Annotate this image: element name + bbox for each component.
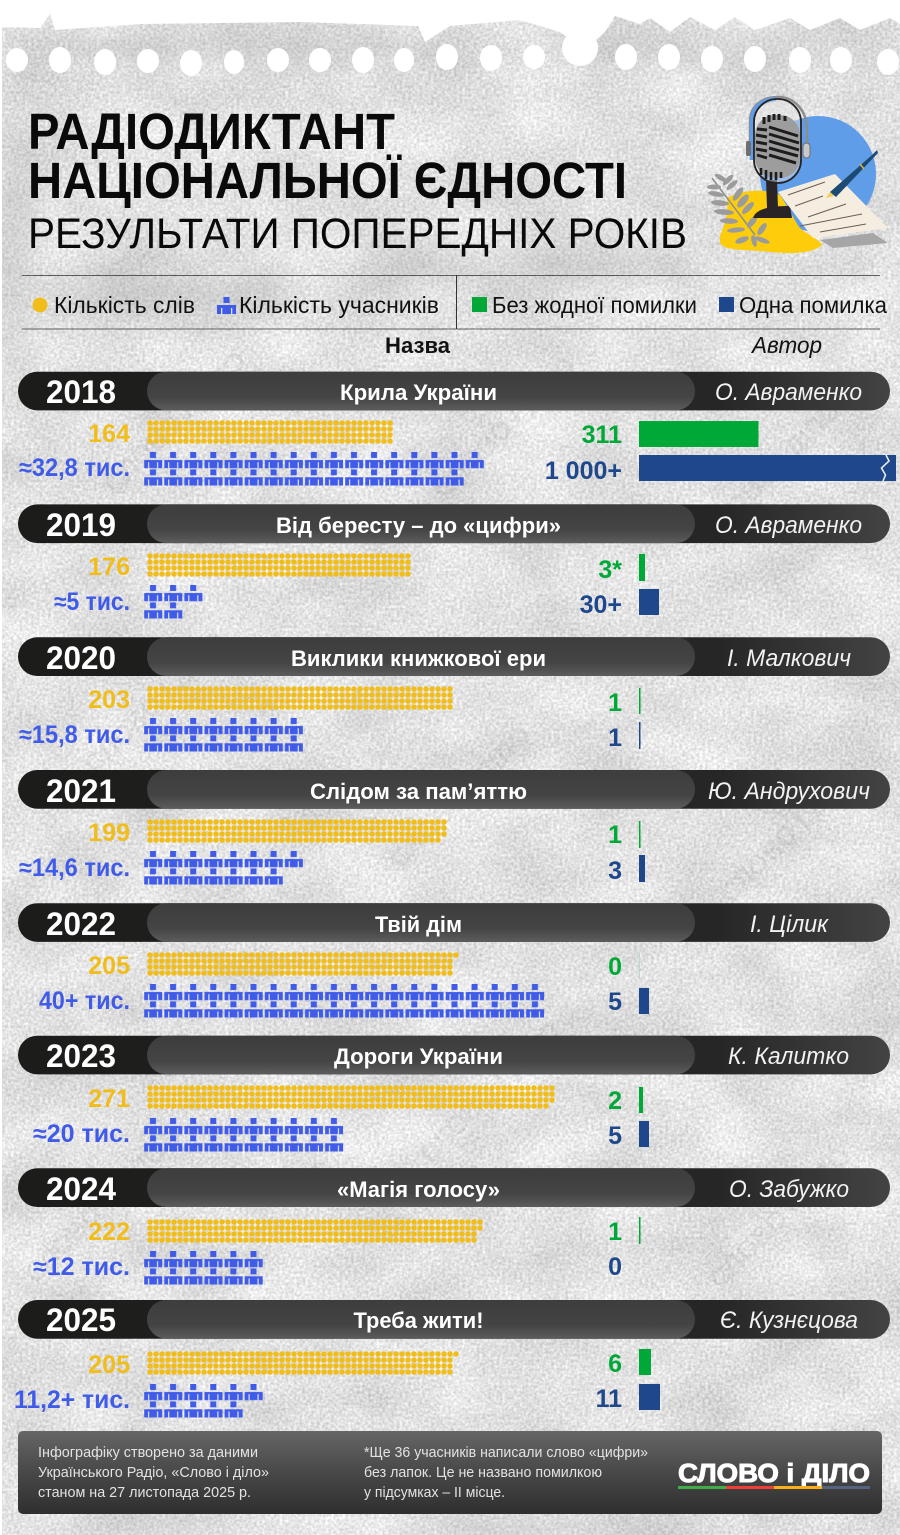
watermarks: О — [481, 103, 500, 122]
row 2024 — [18, 1168, 890, 1285]
watermarks — [18, 103, 867, 1294]
row 2018: 164 — [88, 420, 130, 448]
row 2023: Дороги України — [334, 1044, 503, 1069]
title — [28, 103, 687, 258]
row 2024: 1 — [608, 1218, 622, 1246]
column heading: title: Назва — [385, 333, 451, 358]
column heading: author: Автор — [750, 332, 822, 358]
microphone headphones and frame — [750, 97, 807, 150]
row 2021: ≈14,6 тис. — [19, 854, 130, 882]
row 2019: 2019 — [46, 507, 116, 543]
row 2025: 6 — [608, 1350, 622, 1378]
row 2021: 1 — [608, 821, 622, 849]
row 2023: 2023 — [46, 1038, 116, 1074]
legend — [22, 275, 887, 329]
row 2022: 205 — [88, 952, 130, 980]
logo: Слово і діло: СЛОВО і ДІЛО — [678, 1458, 870, 1488]
row 2022: 40+ тис. — [39, 987, 130, 1015]
row 2023: ≈20 тис. — [33, 1120, 130, 1148]
row 2020: ≈15,8 тис. — [19, 721, 130, 749]
handwritten sheet — [778, 174, 888, 238]
row 2024: ≈12 тис. — [33, 1253, 130, 1281]
microphone stand — [753, 206, 792, 218]
watermarks: СЛОВО І ДІЛО — [713, 755, 867, 909]
footer: sources: Українського Радіо, «Слово і діло» — [38, 1464, 269, 1481]
watermarks: СЛОВО І ДІЛО — [428, 350, 582, 504]
row 2024: 2024 — [46, 1171, 116, 1207]
footer: footnote: у підсумках – ІІ місце. — [364, 1484, 505, 1501]
row 2019: Від бересту – до «цифри» — [276, 513, 561, 538]
row 2024: 0 — [608, 1253, 622, 1281]
legend: participants: Кількість учасників — [239, 292, 439, 318]
row 2023: 271 — [88, 1085, 130, 1113]
row 2023: 2 — [608, 1087, 622, 1115]
row 2020 — [18, 637, 890, 752]
row 2025: 205 — [88, 1351, 130, 1379]
legend: one error: Одна помилка — [739, 292, 887, 318]
row 2021: 2021 — [46, 773, 116, 809]
microphone head — [755, 115, 800, 178]
row 2020: 203 — [88, 686, 130, 714]
row 2020: Виклики книжкової ери — [291, 646, 546, 671]
row 2018: 1 000+ — [545, 457, 622, 485]
row 2019 — [18, 504, 890, 619]
watermarks: СЛОВО І ДІЛО — [703, 1140, 857, 1294]
row 2022: Твій дім — [375, 912, 462, 937]
illustration: microphone, pen and paper — [707, 97, 888, 253]
row 2018: Крила України — [340, 380, 497, 405]
footer: footnote: без лапок. Це не названо помилкою — [364, 1464, 602, 1481]
row 2023 — [18, 1036, 890, 1152]
row 2025: 2025 — [46, 1302, 116, 1338]
row 2020: І. Малкович — [727, 645, 851, 672]
row 2024: О. Забужко — [729, 1176, 849, 1203]
row 2018 — [18, 372, 896, 486]
row 2018: 2018 — [46, 374, 116, 410]
row 2019: 176 — [88, 553, 130, 581]
row 2023: К. Калитко — [728, 1043, 849, 1070]
legend: no errors: Без жодної помилки — [492, 292, 697, 318]
footer: footnote: *Ще 36 учасників написали слово «цифри» — [364, 1444, 648, 1461]
row 2025: Є. Кузнєцова — [720, 1307, 858, 1334]
row 2019: 30+ — [580, 591, 622, 619]
pen — [826, 150, 878, 198]
row 2022: 2022 — [46, 906, 116, 942]
row 2022: І. Цілик — [750, 911, 830, 938]
footer panel — [18, 1431, 882, 1514]
row 2021: 199 — [88, 819, 130, 847]
title: НАЦІОНАЛЬНОЇ ЄДНОСТІ — [28, 152, 627, 209]
row 2025: Треба жити! — [354, 1308, 484, 1333]
row 2021 — [18, 770, 890, 885]
footer: footnote — [364, 1444, 648, 1501]
watermarks: СЛОВО І ДІЛО — [18, 1135, 172, 1289]
row 2018: 311 — [582, 421, 622, 449]
row 2022 — [18, 903, 890, 1018]
row 2023: 5 — [608, 1122, 622, 1150]
legend: words: Кількість слів — [54, 292, 195, 318]
row 2025: 11,2+ тис. — [14, 1386, 130, 1414]
row 2020: 2020 — [46, 640, 116, 676]
footer: sources — [38, 1444, 269, 1501]
title: РАДІОДИКТАНТ — [28, 103, 395, 160]
watermarks: СЛОВО І ДІЛО — [78, 625, 232, 779]
footer: sources: Інфографіку створено за даними — [38, 1444, 258, 1461]
title: РЕЗУЛЬТАТИ ПОПЕРЕДНІХ РОКІВ — [28, 210, 687, 258]
row 2025: 11 — [596, 1385, 622, 1413]
row 2021: 3 — [608, 857, 622, 885]
row 2022: 0 — [608, 953, 622, 981]
row 2024: «Магія голосу» — [337, 1177, 500, 1202]
row 2025 — [14, 1300, 890, 1418]
paper punch holes — [6, 30, 899, 76]
footer: sources: станом на 27 листопада 2025 р. — [38, 1484, 251, 1501]
row 2019: О. Авраменко — [715, 512, 862, 539]
row 2021: Слідом за пам’яттю — [310, 779, 527, 804]
watermarks: СЛОВО І ДІЛО — [98, 345, 252, 499]
leaves — [707, 172, 770, 247]
row 2024: 222 — [88, 1218, 130, 1246]
row 2019: ≈5 тис. — [54, 588, 130, 616]
row 2020: 1 — [608, 724, 622, 752]
row 2020: 1 — [608, 689, 622, 717]
watermarks: СЛОВО І ДІЛО — [693, 395, 847, 549]
row 2018: ≈32,8 тис. — [19, 454, 130, 482]
row 2021: Ю. Андрухович — [708, 778, 870, 805]
row 2018: О. Авраменко — [715, 379, 862, 406]
row 2019: 3* — [598, 556, 622, 584]
watermarks: СЛОВО І ДІЛО — [413, 1015, 567, 1169]
row 2022: 5 — [608, 988, 622, 1016]
watermarks: СЛОВО І ДІЛО — [383, 720, 537, 874]
